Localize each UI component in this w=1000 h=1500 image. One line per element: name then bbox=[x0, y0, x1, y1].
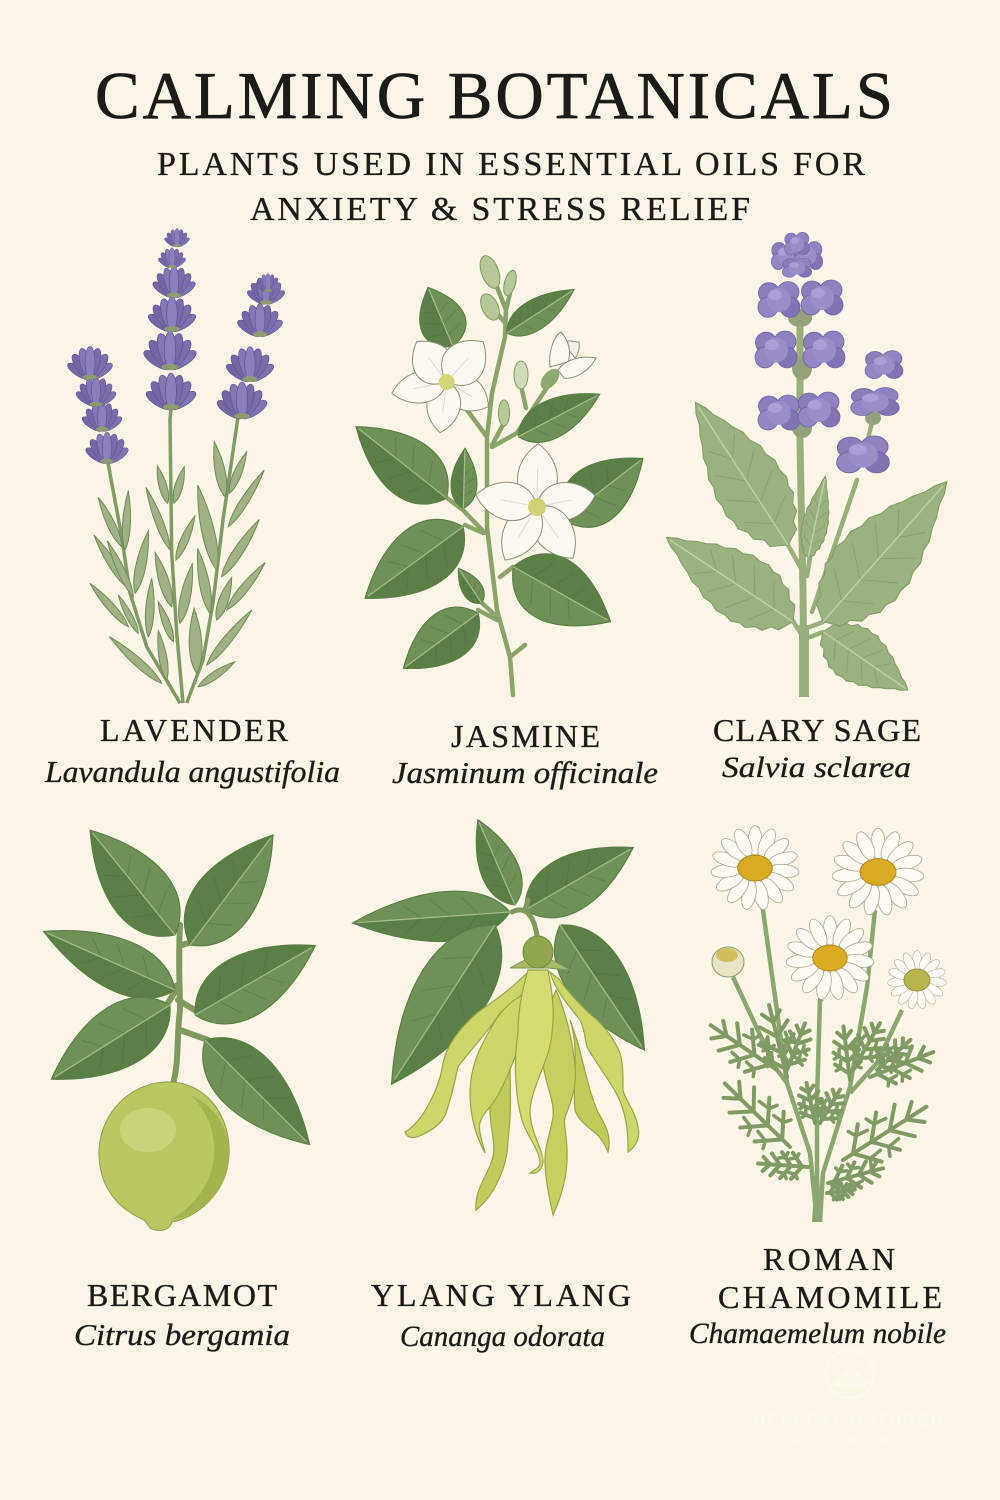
jasmine flower upper bbox=[389, 328, 499, 435]
watermark: HOLISTIC WELLNESS bbox=[788, 1435, 908, 1447]
ylang ylang calyx bbox=[510, 936, 570, 970]
label: lavender bbox=[44, 712, 340, 789]
subtitle bbox=[157, 146, 865, 228]
label: lavender: Lavandula angustifolia bbox=[44, 754, 340, 789]
label: roman chamomile: CHAMOMILE bbox=[718, 1279, 942, 1315]
clary sage side spike bbox=[837, 351, 903, 473]
chamomile bud bbox=[712, 947, 744, 977]
jasmine half-open flower bbox=[537, 332, 596, 393]
ylang ylang petals bbox=[405, 970, 639, 1215]
subtitle: ANXIETY & STRESS RELIEF bbox=[250, 191, 750, 228]
illustration: ylang ylang bbox=[351, 812, 669, 1215]
subtitle: PLANTS USED IN ESSENTIAL OILS FOR bbox=[157, 146, 865, 183]
label: roman chamomile: ROMAN bbox=[763, 1241, 895, 1277]
label: ylang ylang: Cananga odorata bbox=[400, 1320, 605, 1353]
watermark: HEALTHY NATURED bbox=[753, 1410, 943, 1429]
label: jasmine bbox=[392, 718, 658, 790]
label: jasmine: JASMINE bbox=[451, 718, 600, 754]
illustration: bergamot bbox=[33, 811, 332, 1230]
label: lavender: LAVENDER bbox=[100, 712, 289, 748]
illustration: clary sage bbox=[648, 232, 977, 713]
label: clary sage bbox=[713, 712, 921, 784]
bergamot fruit bbox=[99, 1082, 229, 1230]
illustration: roman chamomile bbox=[700, 826, 947, 1222]
illustration: lavender bbox=[65, 228, 287, 703]
label: bergamot: Citrus bergamia bbox=[74, 1317, 290, 1352]
jasmine buds bbox=[476, 253, 528, 426]
title: CALMING BOTANICALS bbox=[95, 59, 893, 133]
label: roman chamomile bbox=[689, 1241, 946, 1350]
label: ylang ylang: YLANG YLANG bbox=[371, 1277, 631, 1313]
label: jasmine: Jasminum officinale bbox=[392, 755, 658, 790]
clary sage main spike bbox=[755, 232, 845, 438]
label: ylang ylang bbox=[371, 1277, 631, 1353]
watermark bbox=[753, 1350, 943, 1447]
jasmine flower lower bbox=[472, 443, 599, 569]
illustration: jasmine bbox=[338, 253, 661, 695]
label: clary sage: CLARY SAGE bbox=[713, 712, 921, 748]
label: bergamot bbox=[74, 1277, 290, 1352]
label: bergamot: BERGAMOT bbox=[87, 1277, 277, 1313]
label: roman chamomile: Chamaemelum nobile bbox=[689, 1317, 946, 1350]
label: clary sage: Salvia sclarea bbox=[722, 751, 911, 784]
